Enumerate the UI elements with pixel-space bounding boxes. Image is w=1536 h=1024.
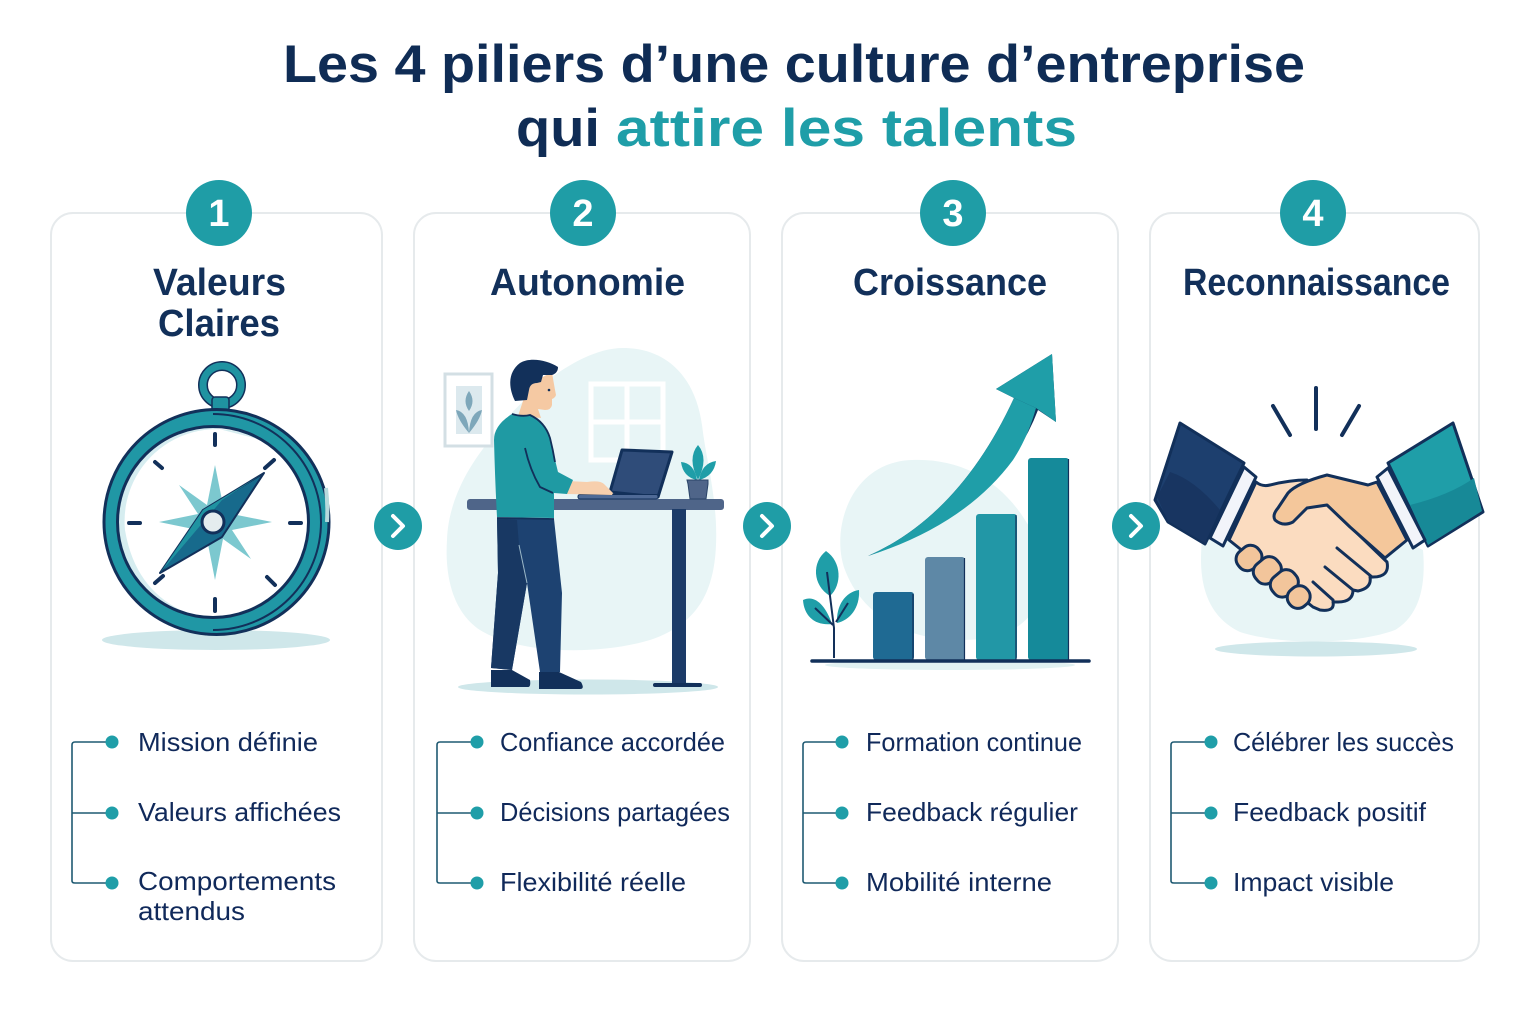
list: Autonomie <box>437 727 730 897</box>
list: Reconnaissance <box>1171 727 1454 897</box>
illustration: person at standing desk <box>445 348 724 694</box>
arrow 1 <box>374 502 422 550</box>
list: Valeurs Claires: Valeurs affichées <box>138 797 341 827</box>
title <box>283 35 1305 158</box>
list: Croissance: Mobilité interne <box>866 867 1052 897</box>
heading: Autonomie: Autonomie <box>490 262 685 304</box>
heading: Valeurs Claires: Valeurs <box>153 262 286 304</box>
badge 4 <box>1280 180 1346 246</box>
badge 2: 2 <box>572 193 594 235</box>
illustration: growth chart <box>803 354 1089 670</box>
list: Autonomie: Décisions partagées <box>500 797 730 827</box>
list: Valeurs Claires: attendus <box>138 896 245 926</box>
arrow 3 <box>1112 502 1160 550</box>
panel: Valeurs Claires <box>51 180 382 961</box>
list: Reconnaissance: Célébrer les succès <box>1233 727 1454 757</box>
icon: compass <box>102 366 330 650</box>
title: Les 4 piliers d’une culture d’entreprise <box>283 35 1305 94</box>
list: Autonomie: Confiance accordée <box>500 727 725 757</box>
list: Valeurs Claires <box>72 727 341 926</box>
illustration: handshake <box>1155 388 1483 656</box>
list: Reconnaissance: Impact visible <box>1233 867 1394 897</box>
badge 1 <box>186 180 252 246</box>
heading: Reconnaissance: Reconnaissance <box>1183 262 1450 304</box>
badge 1: 1 <box>208 193 230 235</box>
panel: Autonomie <box>414 180 750 961</box>
title: attire les talents <box>616 99 1077 158</box>
badge 2 <box>550 180 616 246</box>
badge 4: 4 <box>1302 193 1324 235</box>
panel: Reconnaissance <box>1150 180 1483 961</box>
list: Croissance: Feedback régulier <box>866 797 1078 827</box>
list: Croissance: Formation continue <box>866 727 1082 757</box>
list: Valeurs Claires: Mission définie <box>138 727 318 757</box>
heading: Valeurs Claires <box>153 262 286 345</box>
list: Autonomie: Flexibilité réelle <box>500 867 686 897</box>
title: qui <box>516 99 600 158</box>
badge 3 <box>920 180 986 246</box>
list: Croissance <box>803 727 1082 897</box>
heading: Croissance: Croissance <box>853 262 1047 304</box>
panel: Croissance <box>782 180 1118 961</box>
list: Valeurs Claires: Comportements <box>138 866 336 896</box>
badge 3: 3 <box>942 193 964 235</box>
list: Reconnaissance: Feedback positif <box>1233 797 1427 827</box>
arrow 2 <box>743 502 791 550</box>
heading: Valeurs Claires: Claires <box>158 303 280 345</box>
